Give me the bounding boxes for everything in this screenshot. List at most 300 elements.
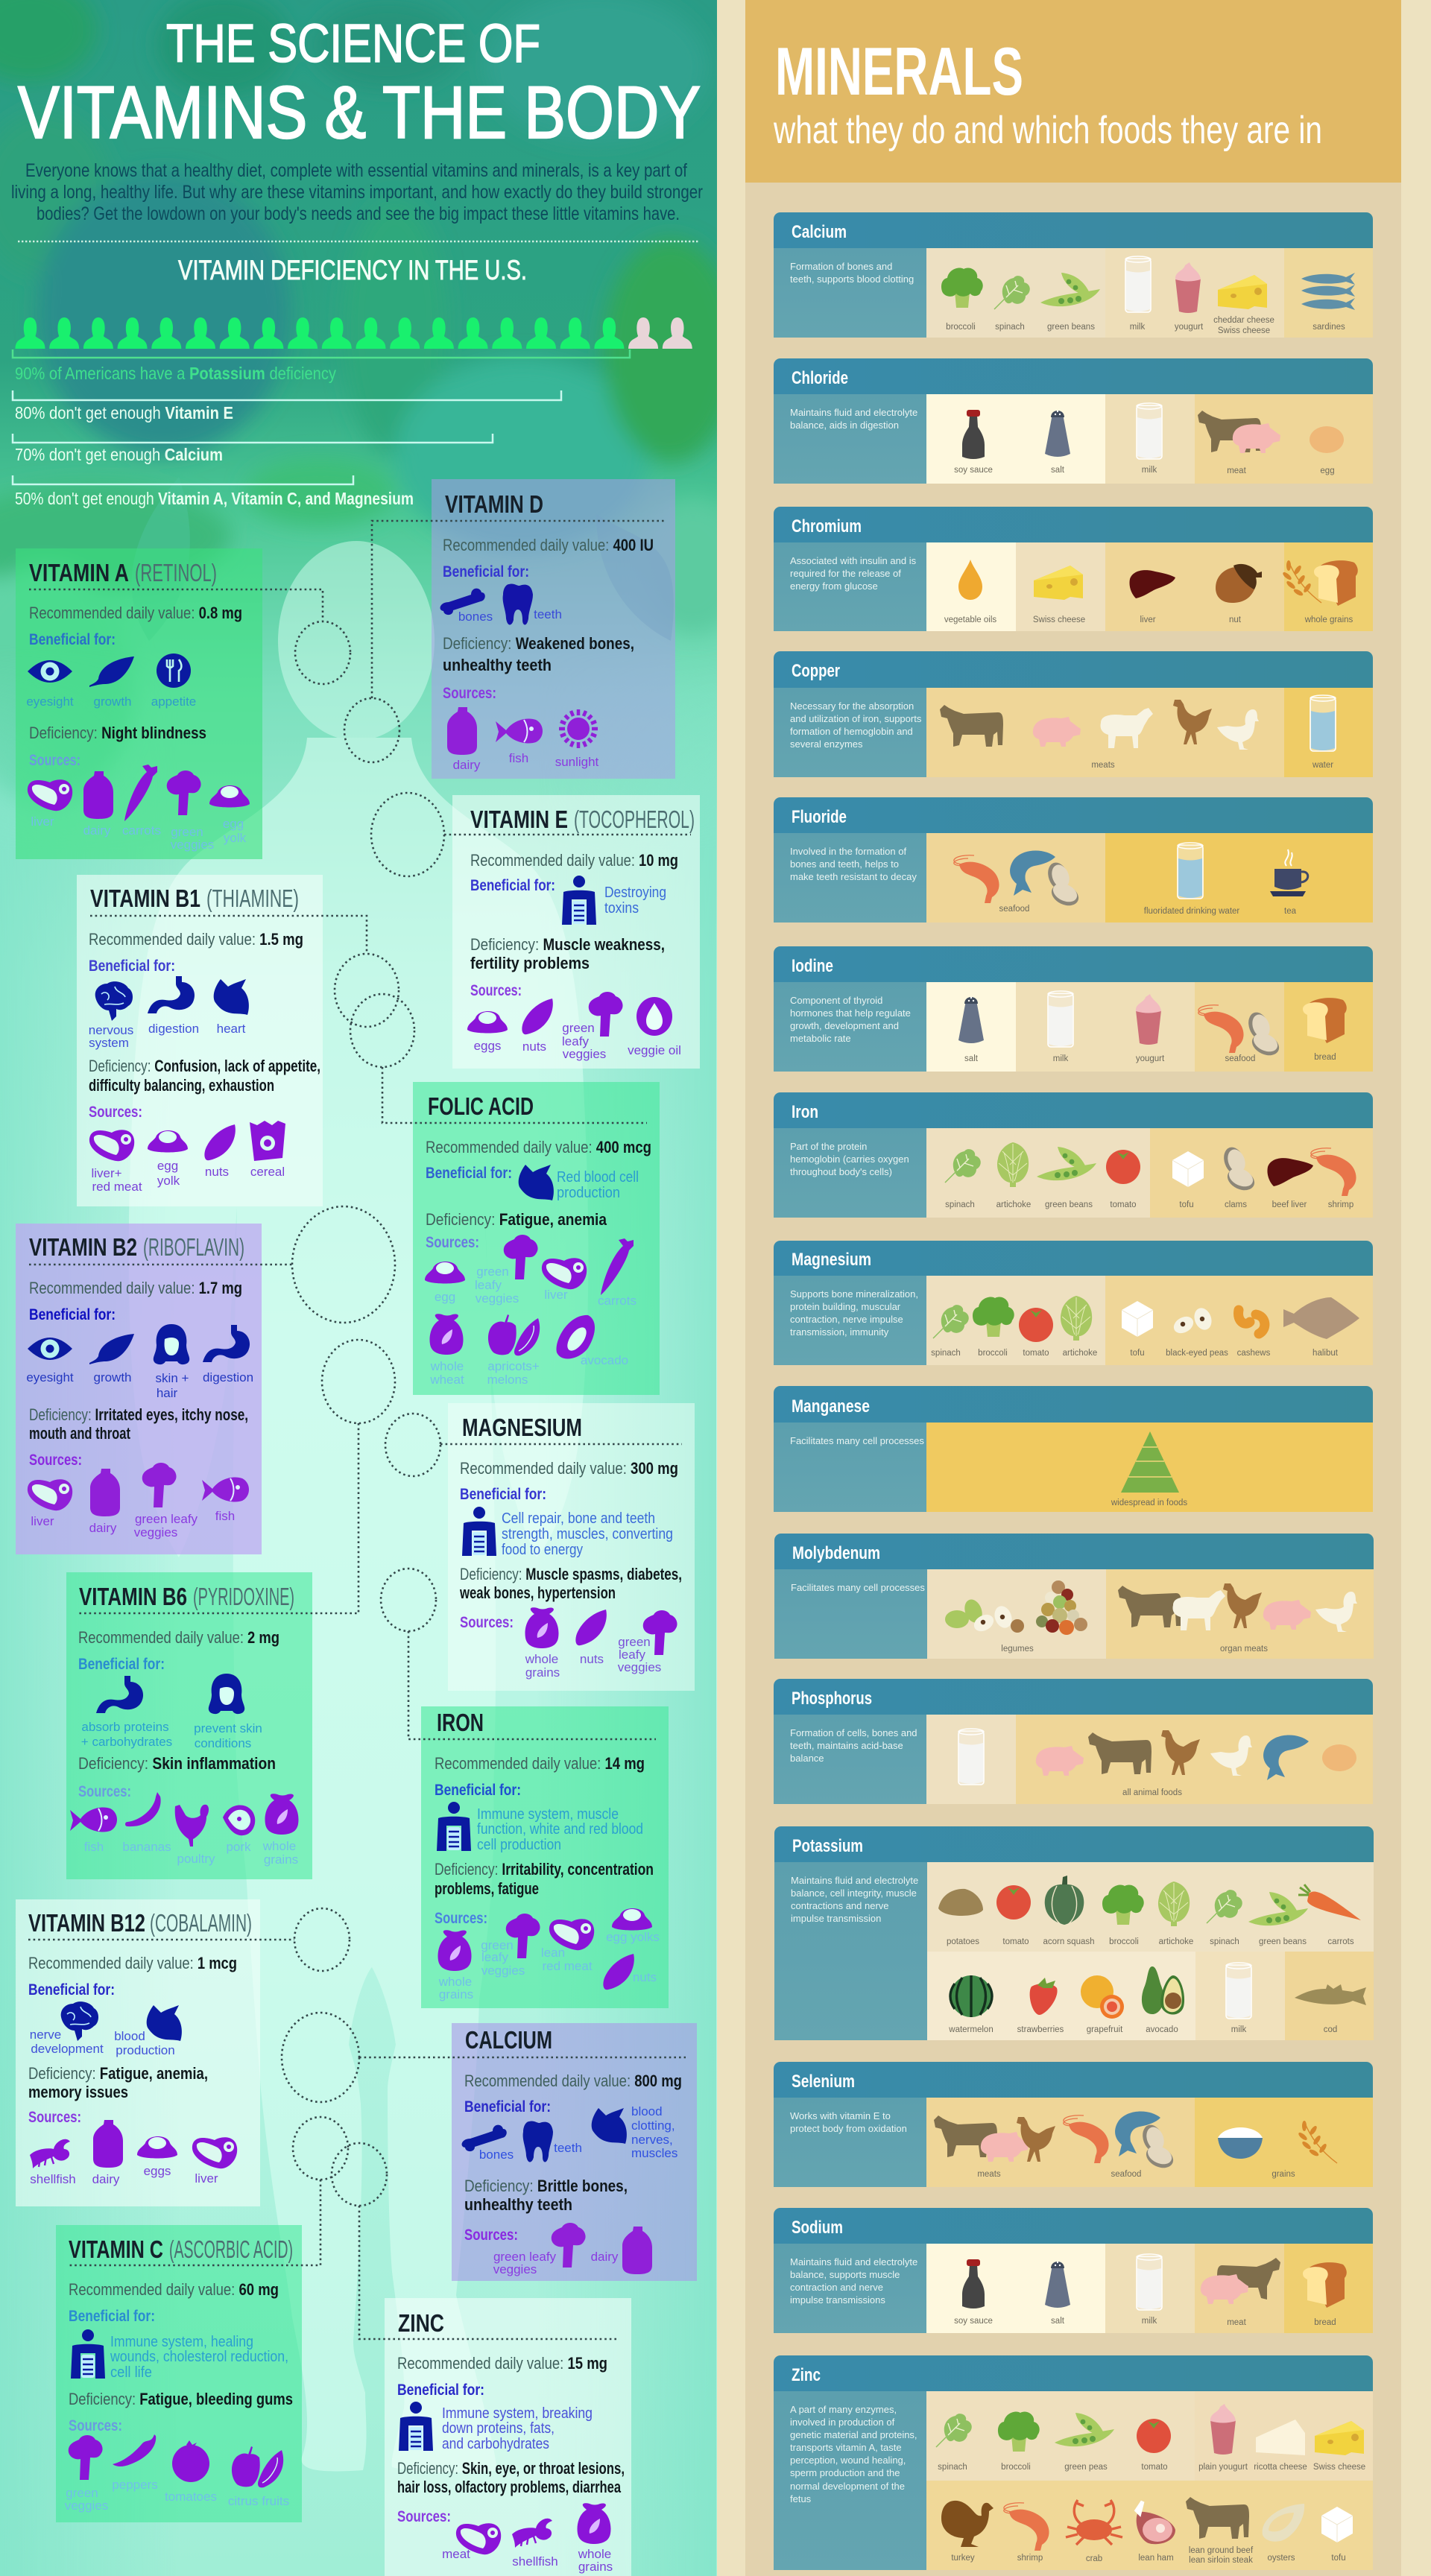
sources: [438, 1908, 660, 2001]
sources: [70, 1792, 298, 1867]
sources: egg yolks: [606, 1930, 660, 1944]
beneficial heading: Beneficial for:: [69, 2308, 155, 2325]
benefit: Immune system, breaking: [442, 2405, 593, 2422]
description: [790, 2404, 917, 2504]
food: salt: [958, 997, 984, 1063]
heading: Vitamin E: (TOCOPHEROL): [574, 806, 695, 833]
benefit: function, white and red blood: [477, 1821, 643, 1838]
benefits: [30, 2001, 182, 2057]
benefits: heart: [217, 1022, 246, 1036]
heading: Vitamin A: VITAMIN A: [29, 559, 129, 586]
sources heading: Sources:: [464, 2227, 518, 2244]
description: Component of thyroid: [790, 995, 882, 1006]
beneficial heading: Beneficial for:: [28, 1981, 115, 1999]
deficiency: Deficiency: Fatigue, anemia,: [28, 2064, 208, 2083]
food: green beans: green beans: [1047, 323, 1095, 332]
food: lean ham: [1137, 2501, 1175, 2563]
description: contraction, nerve impulse: [790, 1314, 903, 1325]
sources: nuts: [580, 1652, 604, 1666]
sources: green leafy: [493, 2250, 557, 2264]
title: VITAMINS & THE BODY: [18, 71, 701, 154]
sources: liver: [31, 814, 54, 829]
title: THE SCIENCE OF: [166, 14, 540, 74]
food: fluoridated drinking water: fluoridated drinking water: [1144, 907, 1239, 916]
food: watermelon: watermelon: [948, 2025, 994, 2034]
benefit: red blood cell production: Red blood cell: [557, 1169, 639, 1186]
description: balance, cell integrity, muscle: [791, 1887, 917, 1899]
panel: Folic acid: [413, 1082, 660, 1395]
deficiency: Deficiency: Irritability, concentration: [435, 1860, 654, 1879]
deficiency: [397, 2459, 625, 2496]
heading: Phosphorus: [792, 1689, 872, 1709]
description: [791, 1875, 918, 1924]
food: lean beef: [1186, 2497, 1254, 2565]
beneficial heading: Beneficial for:: [470, 877, 555, 894]
heading: Iodine: [792, 956, 833, 976]
daily value: Recommended daily value: 14 mg: [435, 1754, 645, 1773]
daily value: Recommended daily value: 1 mcg: [28, 1954, 237, 1972]
deficiency: [443, 634, 634, 674]
sources heading: Sources:: [426, 1234, 479, 1251]
food: artichoke: artichoke: [1159, 1937, 1193, 1946]
heading: Selenium: [792, 2072, 855, 2092]
description: Supports bone mineralization,: [790, 1288, 918, 1300]
description: Associated with insulin and is: [790, 555, 917, 566]
sources: eggs: [144, 2164, 171, 2178]
food: nut: nut: [1229, 615, 1242, 624]
food: meat: [1198, 411, 1280, 475]
sources heading: Sources:: [69, 2417, 122, 2434]
beneficial heading: Beneficial for:: [89, 958, 175, 975]
food: seafood: seafood: [999, 905, 1029, 914]
deficiency: [435, 1860, 654, 1898]
food: milk: [1137, 403, 1162, 475]
deficiency: unhealthy teeth: [443, 656, 552, 674]
sources: [442, 2503, 613, 2574]
daily value: Recommended daily value: 400 mcg: [426, 1138, 651, 1156]
sources: nuts: [633, 1970, 657, 1984]
food: tofu: [1172, 1151, 1204, 1209]
beneficial heading: Beneficial for:: [426, 1165, 512, 1182]
description: impulse transmission: [791, 1913, 881, 1924]
benefits: blood: [631, 2104, 663, 2118]
food: meats: [940, 700, 1259, 770]
food: milk: milk: [1142, 2317, 1157, 2326]
sources heading: Sources:: [397, 2508, 451, 2525]
sources: carrots: [598, 1294, 636, 1308]
description: [790, 1727, 917, 1764]
heading: Vitamin B6: [79, 1583, 294, 1610]
description: Involved in the formation of: [790, 846, 906, 857]
benefit: food to energy: [502, 1542, 583, 1558]
sources: carrots: [122, 823, 161, 838]
sources: grains: [525, 1665, 560, 1680]
food: spinach: [931, 1305, 969, 1358]
description: genetic material and proteins,: [790, 2429, 917, 2440]
sources: green: [481, 1938, 514, 1952]
food: vegetable oils: vegetable oils: [944, 615, 996, 624]
sources: peppers: [112, 2478, 158, 2492]
sources: leafy: [562, 1034, 589, 1048]
beneficial heading: Beneficial for:: [78, 1656, 165, 1673]
food: yogurt: [1175, 262, 1204, 332]
food: turkey: turkey: [951, 2554, 975, 2563]
panel: Iodine mineral card: [774, 946, 1373, 1072]
daily value: Recommended daily value: 1.5 mg: [89, 930, 303, 949]
sources heading: Sources:: [28, 2109, 81, 2126]
food: avocado: [1142, 1966, 1184, 2034]
heading: Vitamin C: (ASCORBIC ACID): [169, 2235, 293, 2263]
panel: Copper mineral card: [774, 651, 1373, 777]
panel: Zinc (vitamins column): [385, 2298, 631, 2576]
food: liver: liver: [1140, 615, 1156, 624]
sources: poultry: [177, 1852, 215, 1866]
benefits: + carbohydrates: [81, 1735, 172, 1749]
benefit: and carbohydrates: [442, 2436, 549, 2452]
food: soy sauce: [954, 2259, 993, 2326]
sources heading: Sources:: [89, 1104, 142, 1121]
food: plain yogurt: plain yougurt: [1198, 2463, 1248, 2472]
panel: Chloride mineral card: [774, 358, 1373, 484]
sources: nuts: [522, 1039, 546, 1054]
deficiency: Deficiency: Skin inflammation: [78, 1754, 276, 1773]
deficiency: Deficiency: Night blindness: [29, 724, 206, 742]
section heading: vitamin deficiency: VITAMIN DEFICIENCY IN THE U.S.: [178, 255, 527, 285]
heading: Vitamin B12: (COBALAMIN): [150, 1909, 252, 1937]
heading: Vitamin B1: (THIAMINE): [206, 884, 299, 912]
heading: Vitamin E: [470, 806, 695, 833]
food: Swiss cheese: Swiss cheese: [1313, 2463, 1365, 2472]
deficiency: fertility problems: [470, 954, 590, 972]
benefits: [462, 2104, 677, 2162]
panel: Chromium mineral card: [774, 507, 1373, 631]
sources heading: Sources:: [435, 1910, 487, 1927]
heading: Fluoride: [792, 807, 847, 827]
heading: Vitamin B6: (PYRIDOXINE): [193, 1583, 294, 1610]
food: salt: [1045, 411, 1070, 475]
food: black-eyed peas: [1166, 1306, 1228, 1358]
food: tofu: tofu: [1331, 2554, 1346, 2563]
food: black-eyed peas: black-eyed peas: [1166, 1349, 1228, 1358]
description: [790, 700, 922, 750]
sources: veggies: [171, 838, 214, 852]
description: balance: [790, 1753, 824, 1764]
sources: eggs: [474, 1039, 501, 1053]
food: all animal foods: [1036, 1730, 1356, 1797]
benefits: nervous: [89, 1023, 133, 1037]
food: broccoli: broccoli: [1001, 2463, 1031, 2472]
description: hemoglobin (carries oxygen: [790, 1153, 909, 1165]
sources: meat: [442, 2547, 470, 2561]
food: spinach: spinach: [931, 1349, 961, 1358]
deficiency: Deficiency: Brittle bones,: [464, 2177, 628, 2195]
description: perception, wound healing,: [790, 2455, 906, 2466]
benefits: eyesight: [26, 1370, 74, 1384]
food: cashews: cashews: [1237, 1349, 1271, 1358]
food: ricotta cheese: ricotta cheese: [1254, 2463, 1307, 2472]
benefits: skin +: [156, 1371, 189, 1385]
food: spinach: spinach: [945, 1200, 975, 1209]
deficiency: [470, 935, 665, 972]
food: tomato: tomato: [1110, 1200, 1137, 1209]
benefits: nerve: [30, 2028, 61, 2042]
benefits: teeth: [554, 2141, 582, 2155]
panel: Vitamin B6: [66, 1572, 312, 1879]
food: milk: [1048, 991, 1073, 1063]
description: make teeth resistant to decay: [790, 871, 917, 882]
food: water: water: [1312, 761, 1333, 770]
deficiency: [459, 1565, 682, 1602]
food: tofu: tofu: [1179, 1200, 1194, 1209]
benefits: system: [89, 1036, 129, 1050]
panel: Vitamin B1: [77, 875, 323, 1206]
description: balance, supports muscle: [790, 2269, 900, 2280]
food: watermelon: [948, 1975, 994, 2034]
daily value: Recommended daily value: 1.7 mg: [29, 1279, 242, 1297]
heading: Magnesium: MAGNESIUM: [462, 1414, 582, 1441]
daily value: Recommended daily value: 800 mg: [464, 2072, 682, 2090]
heading: Vitamin B2: (RIBOFLAVIN): [143, 1233, 244, 1261]
benefits: [26, 1324, 253, 1400]
heading: Vitamin D: VITAMIN D: [445, 490, 543, 518]
food: yogurt: yougurt: [1136, 1054, 1165, 1063]
sources: veggies: [563, 1047, 606, 1061]
panel: Calcium (vitamins column): [452, 2023, 697, 2281]
sources: grains: [264, 1852, 298, 1867]
food: turkey: [941, 2501, 994, 2563]
sources: veggies: [65, 2499, 108, 2513]
sources: fish: [84, 1840, 104, 1854]
food: artichoke: [1061, 1296, 1097, 1358]
heading: Vitamin C: [69, 2235, 293, 2263]
sources: avocado: [581, 1353, 628, 1367]
food: potatoes: [938, 1889, 983, 1946]
daily value: Recommended daily value: 2 mg: [78, 1628, 279, 1647]
panel: Vitamin E: [452, 795, 700, 1069]
heading: Vitamin B12: [28, 1909, 252, 1937]
heading: Copper: [792, 661, 840, 681]
sources: shellfish: [512, 2554, 558, 2569]
sources: [493, 2223, 652, 2276]
stat: 50% A, C, magnesium: [13, 475, 414, 508]
description: and utilization of iron, supports: [790, 713, 922, 724]
food: broccoli: broccoli: [978, 1349, 1008, 1358]
food: artichoke: [996, 1142, 1031, 1209]
food: broccoli: [1102, 1885, 1144, 1946]
benefit: Immune system, healing: [110, 2334, 253, 2350]
food: spinach: spinach: [995, 323, 1025, 332]
beneficial heading: Beneficial for:: [29, 631, 116, 648]
sources: green: [476, 1265, 509, 1279]
intro text block: Everyone knows that a healthy diet, complete with essential vitamins and minerals, is a key part of: [25, 160, 687, 181]
intro text block: bodies? Get the lowdown on your body's needs and see the big impact these little vitamins have.: [37, 203, 680, 224]
deficiency: mouth and throat: [29, 1424, 131, 1443]
panel: Vitamin A: [16, 548, 262, 859]
description: Formation of cells, bones and: [790, 1727, 917, 1738]
description: transmission, immunity: [790, 1326, 889, 1338]
sources: whole: [430, 1359, 464, 1373]
description: Formation of bones and: [790, 261, 892, 272]
sources: grains: [439, 1987, 473, 2001]
sources heading: Sources:: [78, 1783, 131, 1800]
sources: yolk: [224, 831, 247, 845]
intro text block: [11, 160, 703, 224]
sources: red meat: [92, 1180, 142, 1194]
food: plain yogurt: [1198, 2404, 1248, 2472]
benefits: absorb proteins: [81, 1720, 169, 1734]
food: organ meats: [1118, 1583, 1357, 1653]
sources: [30, 2120, 237, 2186]
food: seafood: [1198, 1005, 1283, 1063]
benefit: destroying toxins: toxins: [604, 900, 639, 917]
food: beef liver: [1267, 1158, 1313, 1209]
sources: tomatoes: [165, 2490, 217, 2504]
sources: leafy: [475, 1278, 502, 1292]
food: yogurt: [1136, 994, 1165, 1063]
benefits: development: [31, 2042, 104, 2056]
heading: Vitamin B12: VITAMIN B12: [28, 1909, 145, 1937]
sources: [447, 707, 599, 772]
description: impulse transmissions: [790, 2294, 885, 2306]
food: tofu: [1321, 2507, 1353, 2563]
header: minerals: MINERALS: [775, 34, 1023, 110]
sources: egg: [435, 1290, 455, 1304]
food: beef liver: beef liver: [1272, 1200, 1307, 1209]
food: all animal foods: all animal foods: [1122, 1788, 1182, 1797]
sources: dairy: [89, 1521, 117, 1535]
sources: green: [618, 1635, 651, 1649]
sources: bananas: [122, 1840, 171, 1854]
beneficial heading: Beneficial for:: [29, 1306, 116, 1323]
food: lean ham: lean ham: [1138, 2554, 1174, 2563]
benefits: blood: [114, 2029, 145, 2043]
food: tomato: tomato: [1141, 2463, 1168, 2472]
benefits: appetite: [151, 694, 196, 709]
stat: 70% calcium: 70% don't get enough Calcium: [15, 445, 223, 464]
food: spinach: [945, 1149, 981, 1209]
heading: Chromium: [792, 516, 862, 537]
heading: Sodium: [792, 2218, 843, 2238]
food: shrimp: shrimp: [1328, 1200, 1353, 1209]
food: green beans: [1037, 1147, 1096, 1209]
beneficial heading: Beneficial for:: [435, 1782, 521, 1799]
sources: veggies: [481, 1963, 525, 1978]
food: broccoli: broccoli: [946, 323, 976, 332]
description: throughout body's cells): [790, 1166, 892, 1177]
food: tomato: [1106, 1150, 1140, 1209]
food: grapefruit: grapefruit: [1087, 2025, 1123, 2034]
daily value: Recommended daily value: 300 mg: [460, 1459, 678, 1478]
panel: Vitamin B12: [16, 1899, 260, 2206]
benefits: eyesight: [26, 694, 74, 709]
food: Swiss cheese: [1313, 2421, 1365, 2472]
benefit: [399, 2402, 593, 2452]
deficiency: unhealthy teeth: [464, 2195, 572, 2214]
benefits: growth: [93, 1370, 132, 1384]
beneficial heading: Beneficial for:: [460, 1486, 546, 1503]
description: [790, 555, 917, 592]
daily value: Recommended daily value: 10 mg: [470, 851, 678, 870]
description: [790, 1288, 918, 1338]
benefits: bones: [458, 610, 493, 624]
food: seafood: seafood: [1111, 2170, 1141, 2179]
heading: Potassium: [792, 1836, 863, 1856]
deficiency: memory issues: [28, 2083, 128, 2101]
heading: Vitamin B1: VITAMIN B1: [90, 884, 200, 912]
connectors: dotted leader lines and body-part circles: [28, 521, 691, 2339]
food: meat: meat: [1227, 466, 1247, 475]
sources: apricots+: [487, 1359, 540, 1373]
food: spinach: [936, 2414, 972, 2472]
beneficial heading: Beneficial for:: [464, 2098, 551, 2115]
sources: [89, 1121, 285, 1194]
daily value: Recommended daily value: 60 mg: [69, 2280, 279, 2299]
food: salt: salt: [964, 1054, 979, 1063]
benefits: muscles: [631, 2146, 677, 2160]
stat: 70% calcium: [13, 434, 493, 464]
sources heading: Sources:: [29, 1452, 82, 1469]
title: [18, 14, 701, 154]
panel: Magnesium mineral card: [774, 1241, 1373, 1365]
sources: veggies: [618, 1660, 661, 1674]
panel: Manganese mineral card: [774, 1386, 1373, 1512]
food: seafood: [1064, 2111, 1177, 2179]
deficiency: Deficiency: Confusion, lack of appetite,: [89, 1057, 320, 1075]
beneficial heading: Beneficial for:: [397, 2382, 484, 2399]
benefit: Cell repair, bone and teeth: [502, 1510, 655, 1527]
sources: whole: [438, 1975, 472, 1989]
benefit: [437, 1802, 643, 1853]
panel: Iron: [421, 1706, 669, 2008]
food: cashews: [1237, 1310, 1271, 1358]
description: balance, aids in digestion: [790, 420, 899, 431]
sources: red meat: [542, 1959, 593, 1973]
stat: 90% potassium: 90% of Americans have a Potassium deficiency: [15, 364, 336, 383]
benefit: red blood cell production: [519, 1165, 639, 1201]
sources: shellfish: [30, 2172, 76, 2186]
food: milk: milk: [1142, 466, 1157, 475]
heading: Vitamin B1: [90, 884, 299, 912]
heading: Iron: IRON: [437, 1709, 484, 1736]
food: spinach: spinach: [1210, 1937, 1239, 1946]
description: Maintains fluid and electrolyte: [791, 1875, 918, 1886]
benefits: digestion: [203, 1370, 253, 1384]
panel: Phosphorus mineral card: [774, 1679, 1373, 1804]
food: milk: milk: [1231, 2025, 1246, 2034]
food: tomato: [996, 1885, 1031, 1946]
benefits: prevent skin: [194, 1721, 262, 1735]
food: broccoli: [973, 1297, 1014, 1358]
food: tofu: [1122, 1301, 1153, 1358]
panel: Zinc mineral card: [774, 2355, 1373, 2570]
description: bones and teeth, helps to: [790, 858, 899, 870]
food: nut: [1216, 564, 1262, 624]
food: Swiss cheese: Swiss cheese: [1033, 615, 1085, 624]
food: artichoke: [1158, 1882, 1193, 1946]
heading: Vitamin A: [29, 559, 217, 586]
panel: Vitamin D: [432, 479, 675, 779]
description: [790, 2110, 907, 2134]
description: [790, 261, 914, 285]
food: tea: [1270, 849, 1308, 916]
benefits: production: [116, 2043, 175, 2057]
food: cheese: Swiss cheese: [1218, 326, 1270, 335]
daily value: Recommended daily value: 0.8 mg: [29, 604, 242, 622]
panel: vitamins background: [0, 0, 745, 2576]
food: vegetable oils: [944, 560, 996, 624]
deficiency: Deficiency: Fatigue, bleeding gums: [69, 2390, 293, 2408]
food: tofu: tofu: [1130, 1349, 1145, 1358]
